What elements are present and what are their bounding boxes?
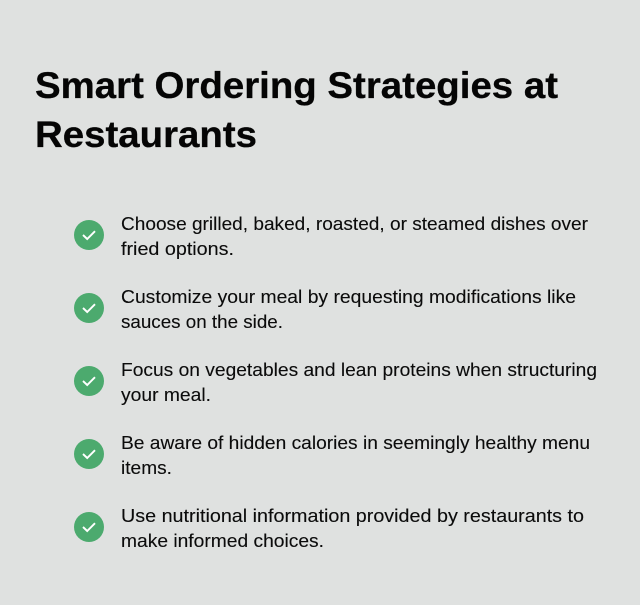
text: item 5: Use nutritional information provided by restaurants to bbox=[121, 505, 584, 526]
text: item 5 bbox=[121, 505, 584, 551]
text: item 2: Customize your meal by requesting modifications like bbox=[121, 286, 576, 307]
item 1 bbox=[74, 213, 588, 259]
text: item 2: sauces on the side. bbox=[121, 311, 283, 332]
item 2 bbox=[74, 286, 576, 332]
text: item 1 bbox=[121, 213, 588, 259]
text: item 1: Choose grilled, baked, roasted, or steamed dishes over bbox=[121, 213, 588, 234]
title: Restaurants bbox=[35, 114, 257, 155]
title: Smart Ordering Strategies at bbox=[35, 65, 558, 106]
item 3 bbox=[74, 359, 597, 405]
text: item 3 bbox=[121, 359, 597, 405]
text: item 2 bbox=[121, 286, 576, 332]
checklist bbox=[74, 213, 597, 551]
icon: check mark 2 bbox=[74, 293, 104, 323]
text: item 1: fried options. bbox=[121, 238, 234, 259]
icon: check mark 4 bbox=[74, 439, 104, 469]
text: item 4 bbox=[121, 432, 590, 478]
icon: check mark 5 bbox=[74, 512, 104, 542]
text: item 3: Focus on vegetables and lean proteins when structuring bbox=[121, 359, 597, 380]
text: item 4: items. bbox=[121, 457, 172, 478]
text: item 3: your meal. bbox=[121, 384, 211, 405]
item 5 bbox=[74, 505, 584, 551]
text: item 5: make informed choices. bbox=[121, 530, 324, 551]
icon: check mark 1 bbox=[74, 220, 104, 250]
title bbox=[35, 65, 558, 155]
item 4 bbox=[74, 432, 590, 478]
icon: check mark 3 bbox=[74, 366, 104, 396]
text: item 4: Be aware of hidden calories in seemingly healthy menu bbox=[121, 432, 590, 453]
